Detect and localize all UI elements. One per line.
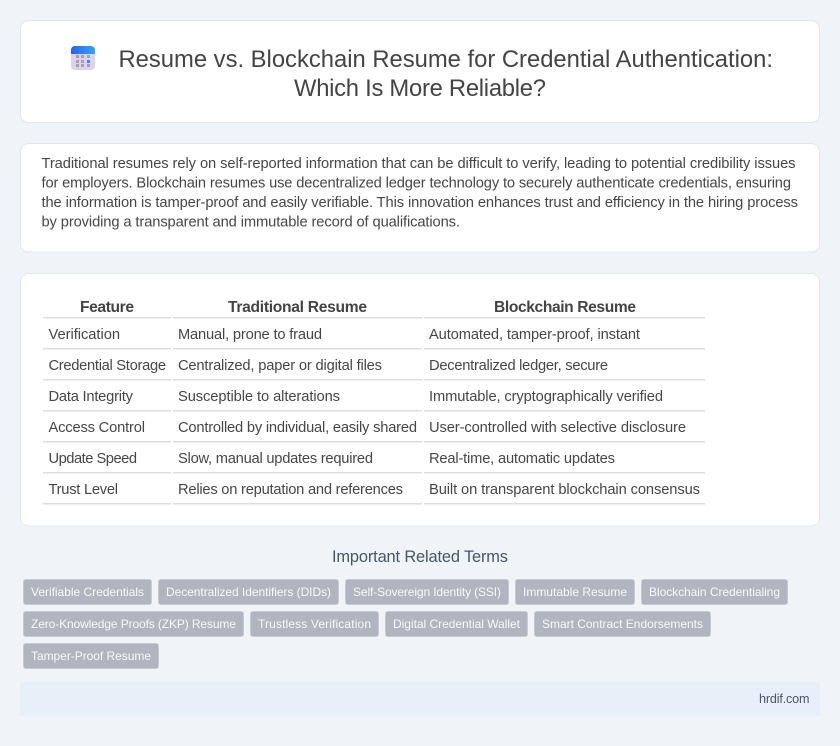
tag list: related terms: Digital Credential Wallet: [393, 617, 521, 631]
row: verification: Verification: [48, 327, 120, 343]
row: data integrity: Susceptible to alterations: [178, 389, 340, 405]
footer: [20, 682, 820, 716]
row: trust level: [48, 482, 700, 498]
row: credential storage: Credential Storage: [48, 358, 166, 374]
title: Resume vs. Blockchain Resume for Credential Authentication:: [118, 46, 773, 73]
table header row: Traditional Resume: [228, 299, 367, 316]
row: credential storage: [48, 358, 608, 374]
tag list: related terms: [24, 580, 788, 668]
tag list: related terms: Blockchain Credentialing: [649, 585, 780, 599]
row: access control: [48, 420, 686, 436]
tag list: related terms: Zero-Knowledge Proofs (ZKP) Resume: [31, 617, 236, 631]
tag list: related terms: Trustless Verification: [258, 617, 371, 631]
row: data integrity: [48, 389, 663, 405]
row: data integrity: Immutable, cryptographically verified: [429, 389, 663, 405]
row: access control: Controlled by individual, easily shared: [178, 420, 417, 436]
table header row: [80, 299, 636, 316]
row: verification: [48, 327, 640, 343]
table header row: Blockchain Resume: [494, 299, 636, 316]
footer: hrdif.com: [759, 692, 810, 706]
row: update speed: [48, 451, 615, 467]
tag list: related terms: Immutable Resume: [523, 585, 627, 599]
row: credential storage: Decentralized ledger, secure: [429, 358, 608, 374]
row: trust level: Built on transparent blockchain consensus: [429, 482, 700, 498]
row: verification: Automated, tamper-proof, instant: [429, 327, 640, 343]
text block: introduction paragraph: for employers. Blockchain resumes use decentralized ledger technology to securely authenticate credentials, ensuring: [42, 176, 791, 192]
text block: introduction paragraph: Traditional resumes rely on self-reported information that can be difficult to verify, leading to potential credibility issues: [42, 156, 796, 172]
title: [118, 46, 773, 102]
row: access control: Access Control: [48, 420, 145, 436]
tag list: related terms: Smart Contract Endorsements: [542, 617, 703, 631]
row: credential storage: Centralized, paper or digital files: [178, 358, 382, 374]
row: data integrity: Data Integrity: [48, 389, 134, 405]
row: access control: User-controlled with selective disclosure: [429, 420, 686, 436]
tag list: related terms: Decentralized Identifiers (DIDs): [166, 585, 331, 599]
panel: header: [20, 20, 820, 122]
text block: introduction paragraph: the information is tamper-proof and easily verifiable. This innovation enhances trust and efficiency in the hiring process: [42, 195, 798, 211]
row: trust level: Relies on reputation and references: [178, 482, 403, 498]
panel: comparison table: [20, 274, 820, 526]
text block: introduction paragraph: [42, 156, 798, 230]
tag list: related terms: Tamper-Proof Resume: [31, 649, 151, 663]
table header row: Feature: [80, 299, 134, 316]
row: update speed: Slow, manual updates required: [178, 451, 373, 467]
row: update speed: Update Speed: [48, 451, 137, 467]
heading: important related terms: Important Related Terms: [332, 548, 508, 566]
table grid lines: [43, 317, 705, 504]
panel: introduction: [20, 144, 820, 252]
row: trust level: Trust Level: [48, 482, 118, 498]
row: update speed: Real-time, automatic updates: [429, 451, 615, 467]
text block: introduction paragraph: by providing a transparent and immutable record of qualifications.: [42, 214, 460, 230]
tag list: related terms: Verifiable Credentials: [31, 585, 144, 599]
row: verification: Manual, prone to fraud: [178, 327, 322, 343]
icon: calendar: [71, 46, 95, 70]
title: Which Is More Reliable?: [294, 75, 546, 102]
tag list: related terms: Self-Sovereign Identity (SSI): [353, 585, 501, 599]
